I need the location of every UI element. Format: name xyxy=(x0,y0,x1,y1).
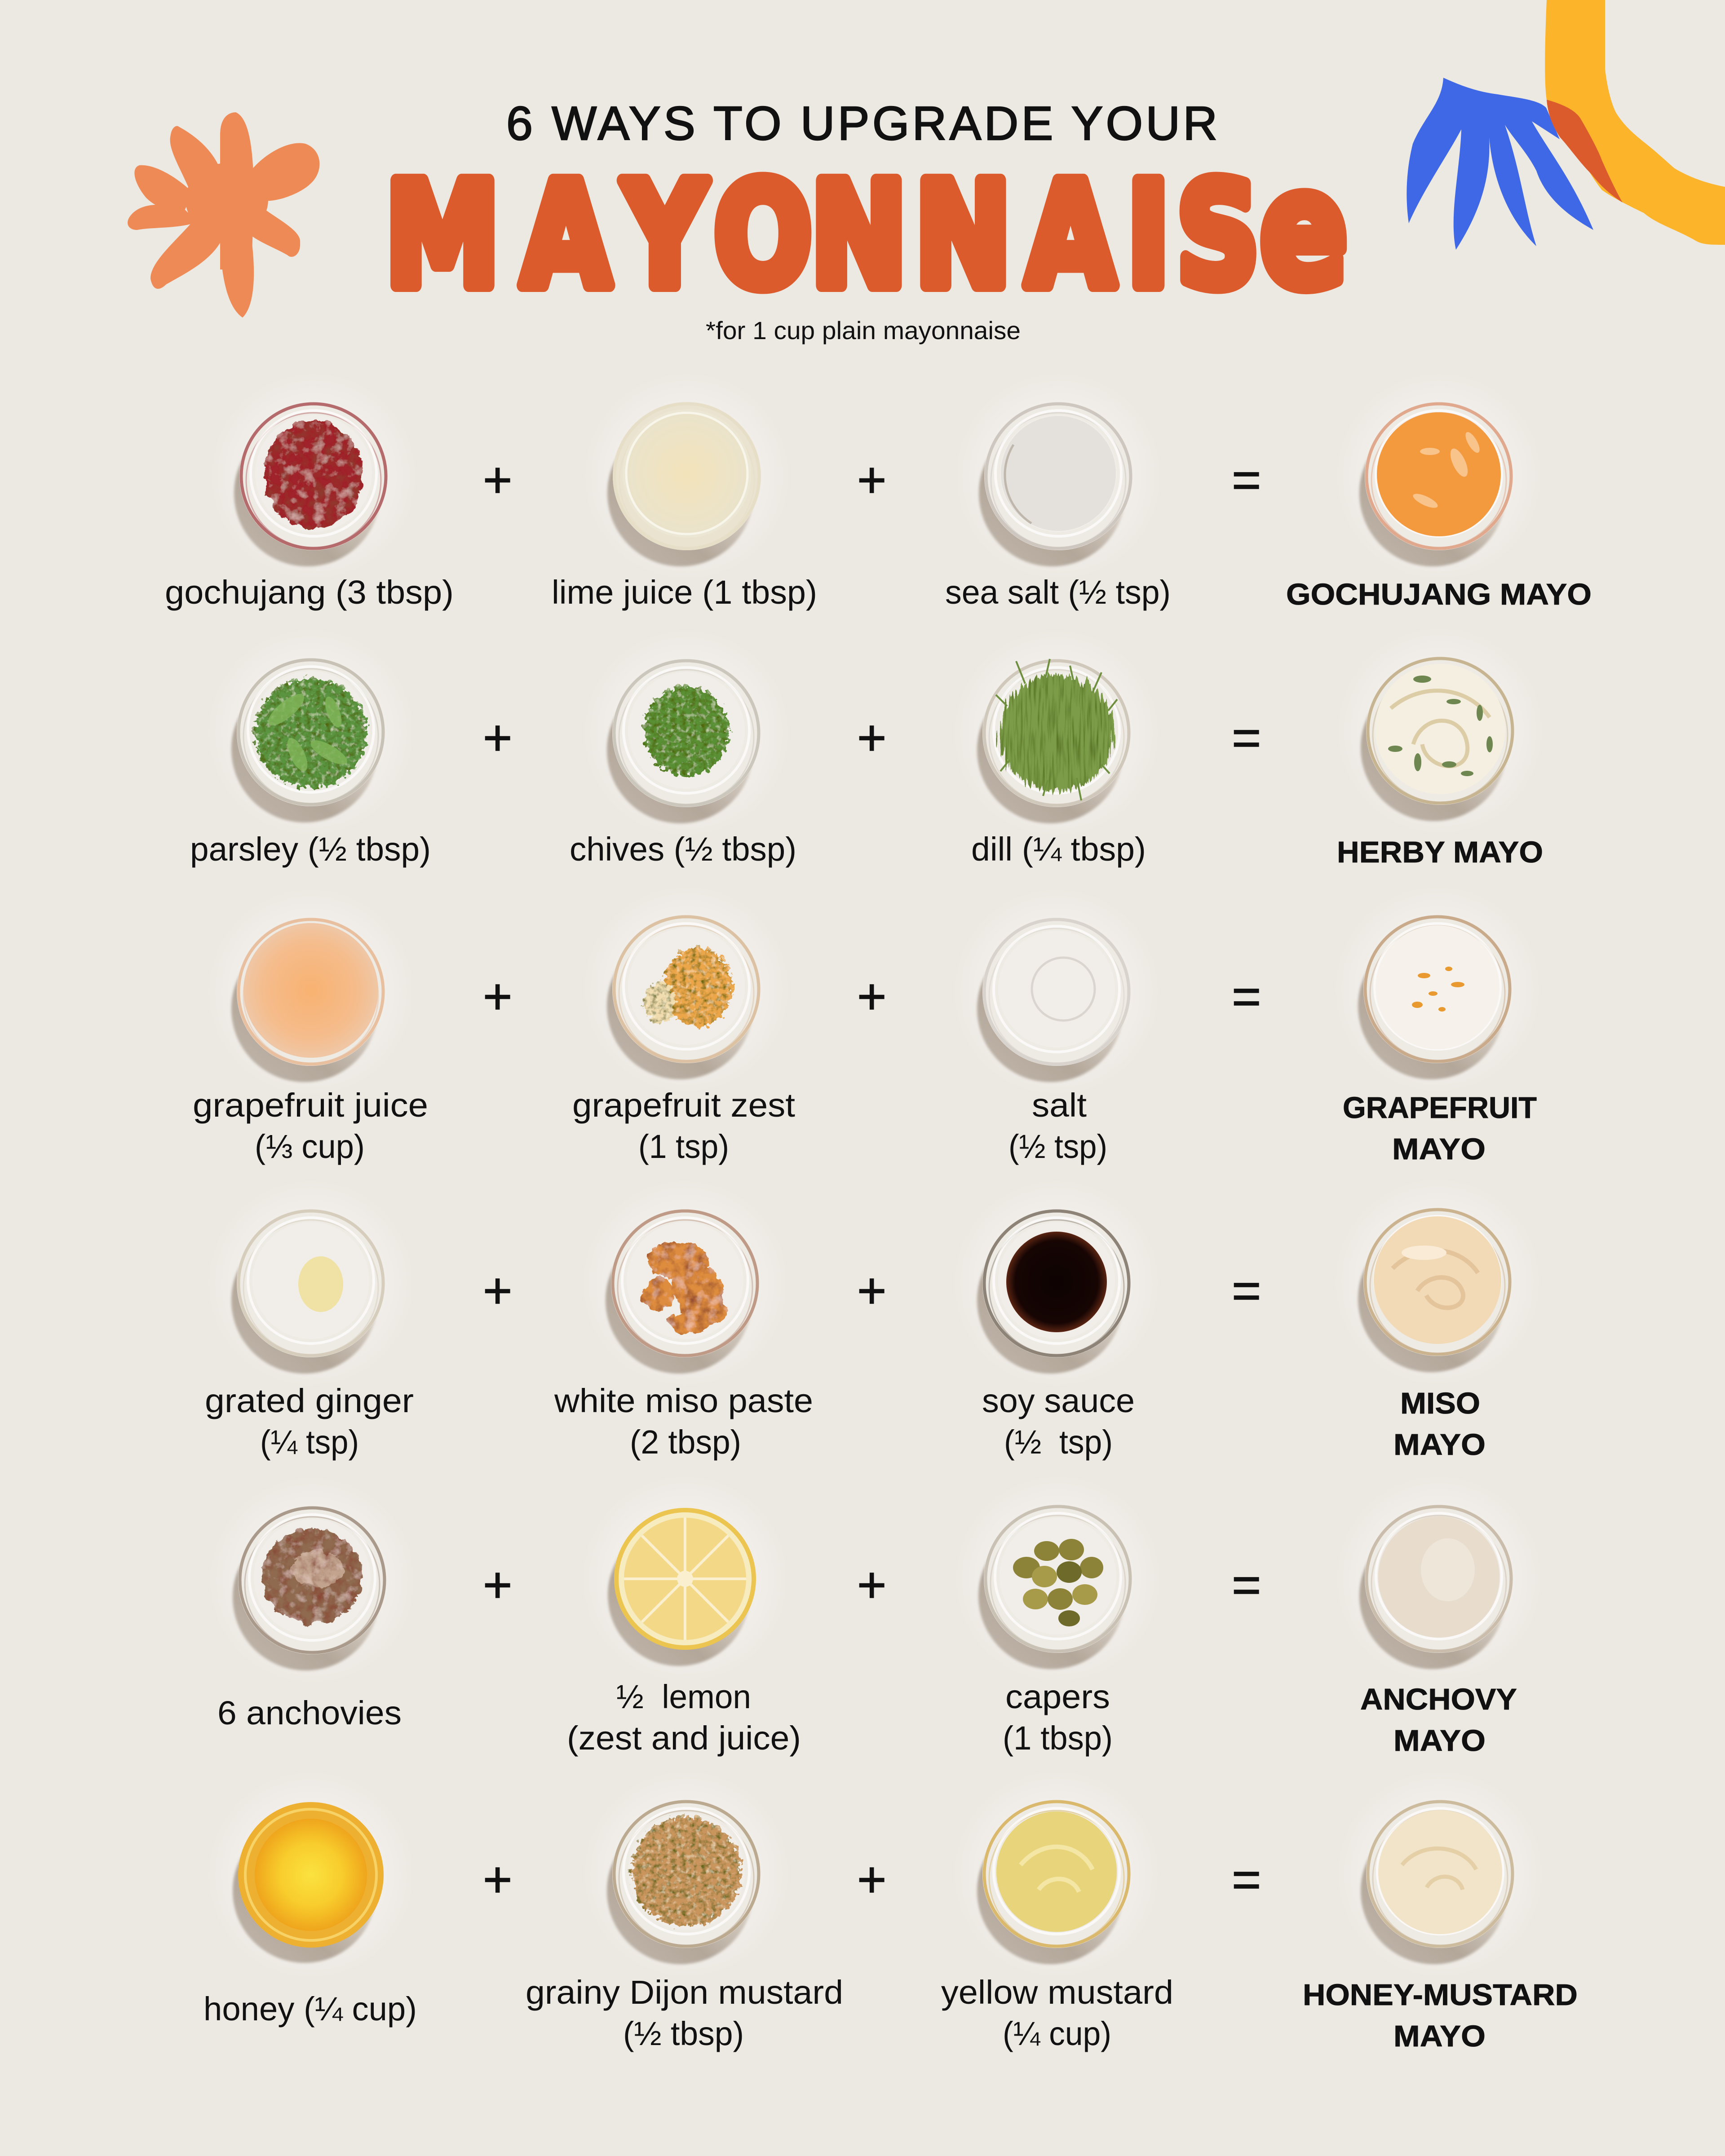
equals: = xyxy=(1232,452,1261,508)
recipe row: miso mayo: (½ tsp) xyxy=(1004,1423,1113,1461)
plus: + xyxy=(483,968,512,1025)
label: gochujang mayo: GOCHUJANG MAYO xyxy=(1286,578,1592,611)
equals: = xyxy=(1232,1263,1261,1319)
recipe row: anchovy mayo xyxy=(207,1473,1544,1758)
plus: + xyxy=(857,1263,886,1319)
plus: + xyxy=(857,1557,886,1613)
recipe row: grapefruit mayo xyxy=(193,884,1543,1166)
photo: honey bowl xyxy=(205,1769,416,1980)
label: anchovy mayo: ANCHOVY xyxy=(1360,1683,1517,1716)
title: mayonnaise: MAYONNAISe xyxy=(385,135,1348,323)
photo: soy sauce bowl xyxy=(951,1178,1162,1389)
photo: parsley bowl xyxy=(205,627,416,838)
photo: white miso paste bowl xyxy=(579,1178,791,1389)
photo: anchovy mayo bowl xyxy=(1333,1473,1544,1684)
recipe row: honey-mustard mayo: MAYO xyxy=(1393,2019,1486,2053)
recipe row: anchovy mayo: (zest and juice) xyxy=(567,1719,801,1757)
photo: grapefruit mayo bowl xyxy=(1332,884,1543,1095)
icon: yellow ribbon xyxy=(1545,0,1725,245)
label: sea salt: sea salt (½ tsp) xyxy=(945,574,1171,611)
recipe row: honey-mustard mayo: (½ tbsp) xyxy=(623,2015,744,2052)
label: white miso paste: white miso paste xyxy=(554,1382,813,1419)
recipe row: honey-mustard mayo: (¼ cup) xyxy=(1003,2015,1111,2052)
label: chives: chives (½ tbsp) xyxy=(570,831,796,868)
photo: miso mayo bowl xyxy=(1332,1176,1543,1387)
plus: + xyxy=(857,452,886,508)
subtitle: *for 1 cup plain mayonnaise xyxy=(706,316,1021,345)
photo: sea salt bowl xyxy=(953,371,1164,582)
icon: leaf and ribbon overlap xyxy=(1547,100,1623,203)
plus: + xyxy=(483,452,512,508)
label: soy sauce: soy sauce xyxy=(982,1382,1135,1419)
label: 6 anchovies: 6 anchovies xyxy=(217,1694,402,1732)
label: grapefruit mayo: GRAPEFRUIT xyxy=(1343,1091,1537,1125)
equals: = xyxy=(1232,968,1261,1025)
recipe row: honey-mustard mayo xyxy=(203,1768,1578,2053)
plus: + xyxy=(483,1851,512,1908)
heading: 6 ways to upgrade your: 6 WAYS TO UPGRADE YOUR xyxy=(506,97,1217,150)
photo: herby mayo bowl xyxy=(1335,625,1546,836)
photo: honey-mustard mayo bowl xyxy=(1335,1768,1546,1979)
plus: + xyxy=(857,1851,886,1908)
label: grated ginger: grated ginger xyxy=(205,1382,414,1419)
photo: yellow mustard bowl xyxy=(951,1768,1162,1979)
recipe row: grapefruit mayo: MAYO xyxy=(1392,1132,1486,1166)
photo: grated ginger bowl xyxy=(205,1178,416,1389)
equals: = xyxy=(1232,1557,1261,1613)
photo: chives bowl xyxy=(581,627,792,839)
photo: gochujang mayo bowl xyxy=(1333,371,1544,582)
recipe row: miso mayo: MAYO xyxy=(1393,1428,1486,1462)
plus: + xyxy=(483,710,512,766)
plus: + xyxy=(483,1557,512,1613)
recipe row: miso mayo: (2 tbsp) xyxy=(630,1423,741,1461)
photo: dill bowl xyxy=(951,627,1162,839)
label: gochujang: gochujang (3 tbsp) xyxy=(165,574,454,611)
label: dill: dill (¼ tbsp) xyxy=(971,831,1146,868)
label: lime juice: lime juice (1 tbsp) xyxy=(552,574,817,611)
icon: blue leaf xyxy=(1407,78,1593,250)
equals: = xyxy=(1232,710,1261,766)
equals: = xyxy=(1232,1851,1261,1908)
plus: + xyxy=(857,968,886,1025)
recipe row: grapefruit mayo: (⅓ cup) xyxy=(255,1128,365,1165)
label: half lemon: ½ lemon xyxy=(616,1678,751,1715)
label: honey: honey (¼ cup) xyxy=(203,1990,417,2028)
recipe row: anchovy mayo: MAYO xyxy=(1393,1724,1486,1758)
plus: + xyxy=(483,1263,512,1319)
label: herby mayo: HERBY MAYO xyxy=(1337,835,1543,869)
photo: grainy Dijon mustard bowl xyxy=(581,1768,792,1979)
label: grapefruit zest: grapefruit zest xyxy=(572,1087,795,1124)
photo: salt bowl xyxy=(951,886,1162,1097)
photo: lime juice bowl xyxy=(581,371,792,582)
label: grainy Dijon mustard: grainy Dijon mustard xyxy=(526,1974,843,2011)
label: salt: salt xyxy=(1032,1087,1087,1124)
recipe row: herby mayo xyxy=(190,625,1546,869)
photo: grapefruit zest bowl xyxy=(581,884,792,1095)
photo: gochujang bowl xyxy=(208,371,419,582)
photo: capers bowl xyxy=(952,1473,1163,1684)
recipe row: grapefruit mayo: (1 tsp) xyxy=(638,1128,729,1165)
label: capers: capers xyxy=(1005,1678,1110,1715)
recipe row: anchovy mayo: (1 tbsp) xyxy=(1003,1719,1113,1757)
recipe row: miso mayo: (¼ tsp) xyxy=(260,1423,359,1461)
label: grapefruit juice: grapefruit juice xyxy=(193,1087,428,1124)
label: honey-mustard mayo: HONEY-MUSTARD xyxy=(1303,1978,1578,2012)
label: yellow mustard: yellow mustard xyxy=(941,1974,1173,2011)
recipe row: miso mayo xyxy=(205,1176,1543,1462)
plus: + xyxy=(857,710,886,766)
icon: orange flower xyxy=(128,112,319,318)
label: miso mayo: MISO xyxy=(1400,1387,1480,1420)
photo: half lemon xyxy=(579,1473,791,1684)
recipe row: grapefruit mayo: (½ tsp) xyxy=(1008,1128,1107,1165)
photo: anchovies bowl xyxy=(207,1475,418,1686)
photo: grapefruit juice bowl xyxy=(205,886,416,1097)
recipe row: gochujang mayo xyxy=(165,371,1592,611)
label: parsley: parsley (½ tbsp) xyxy=(190,831,431,868)
